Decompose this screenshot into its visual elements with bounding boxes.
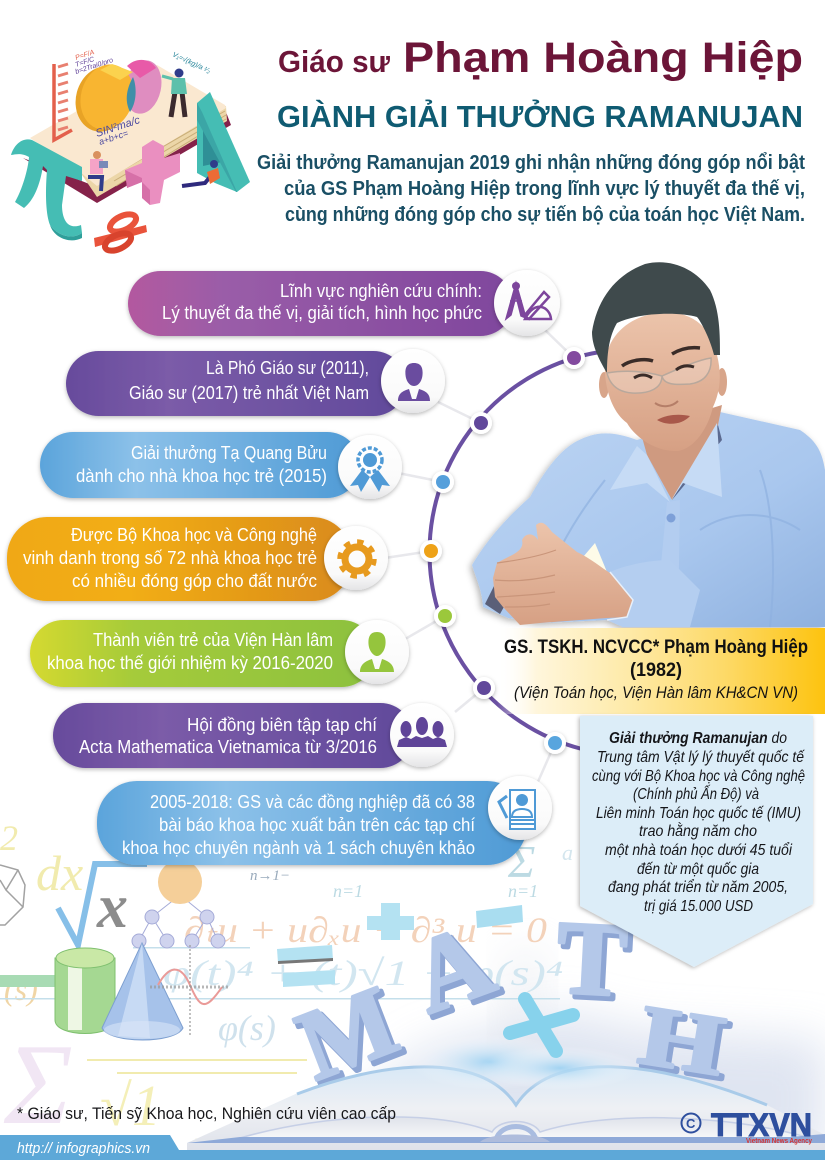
pale math formulas: φ(t)⁴ + (t)√1 + φ(s)⁴ [163,953,563,993]
logo: TTXVN: C [686,1116,696,1131]
eyes, brows, mouth [622,348,700,366]
pill 2: professor: Là Phó Giáo sư (2011), [206,358,369,378]
illustration: math book and figures: a+b+c= [98,128,129,147]
pill 7: publications [97,776,552,865]
3D letters: H [637,991,735,1098]
collar [610,423,722,502]
formula right: V₁=√(kg)/a ¹⁄₂ [171,51,212,75]
cylinder [0,975,68,987]
callout: about the prize: Giải thưởng Ramanujan do [609,730,787,747]
pale math formulas: (s) [4,971,38,1007]
pale math formulas: n→1− [250,868,290,884]
venn pie [120,57,166,117]
3D letters: A [400,904,511,1040]
right sleeve cuff [607,560,700,627]
3D letters: T [554,898,630,1019]
SIN text: SIN²ma/c [94,114,142,140]
footer bar [0,1135,825,1160]
portrait photo [472,262,825,627]
pill 5: academy member: khoa học thế giới nhiệm kỳ 2016-2020 [47,653,333,673]
wireframe polyhedron [0,865,25,925]
caption: name [497,628,825,714]
plus [125,140,180,205]
logo: TTXVN: Vietnam News Agency [746,1138,812,1145]
letter x: x [96,873,128,941]
letter A [197,92,250,192]
icon: person [345,620,409,684]
pale math formulas: a [562,840,573,865]
pale math formulas: Σ [507,836,535,887]
pill 7: publications: khoa học chuyên ngành và 1 sách chuyên khảo [122,838,475,858]
illustration: math book and figures: b=2Trai0/pro [74,57,114,76]
title [277,34,803,134]
title: Giáo sư [278,44,391,79]
shirt [472,412,825,627]
pill 1: research field: Lý thuyết đa thế vị, giải tích, hình học phức [162,303,482,323]
icon: gear [324,526,388,590]
pill 6: editorial board: Hội đồng biên tập tạp chí [187,715,377,735]
pale math formulas: 2 [0,818,18,858]
footnote: * Giáo sư, Tiến sỹ Khoa học, Nghiên cứu viên cao cấp [17,1105,396,1123]
illustration: math book and figures [11,49,250,254]
3D letters: M [287,968,415,1106]
3D letters: H [633,987,731,1094]
hair [592,262,720,373]
hand and forearm [493,523,633,625]
person sitting [93,151,101,159]
timeline arc [385,330,600,800]
open book [187,1067,825,1150]
face [605,312,720,451]
pale math formulas [0,818,573,1154]
neck [640,405,722,500]
plus and minus blocks [367,903,414,940]
letter pi [11,139,82,236]
caption: name: (1982) [630,660,682,681]
title: Phạm Hoàng Hiệp [403,34,803,82]
illustration: math book and figures: T=F/C [74,56,96,69]
timeline dots [420,347,585,754]
person reclining [182,172,214,186]
percent [94,225,147,247]
dark cuff [485,586,505,614]
footer bar: http:// infographics.vn [17,1140,150,1157]
pill 3: Ta Quang Buu prize: dành cho nhà khoa học trẻ (2015) [76,466,327,486]
pill 7: publications: 2005-2018: GS và các đồng nghiệp đã có 38 [150,792,475,812]
book pages side [80,106,227,197]
3D letters: A [396,900,507,1036]
pill 2: professor [66,349,445,416]
equals blocks [277,945,333,963]
3D letters: M [283,964,411,1102]
intro text [257,152,805,226]
callout: about the prize [580,716,813,967]
pale math formulas: √1 [100,1073,161,1138]
pill 4: ministry honour: vinh danh trong số 72 nhà khoa học trẻ [23,548,317,568]
background: math illustration [0,818,825,1160]
callout: about the prize: một nhà toán học dưới 45 tuổi [605,841,792,859]
icon: ribbon [338,435,402,499]
formula small: P=F/A [74,49,96,62]
logo: TTXVN: TTXVN [711,1107,812,1143]
3D letters: T [558,902,634,1023]
callout: about the prize: đang phát triển từ năm 2005, [608,878,788,896]
book top [30,65,226,186]
root sign [58,864,147,945]
callout: about the prize: đến từ một quốc gia [637,861,759,878]
book cover [23,112,231,203]
pill 3: Ta Quang Buu prize [40,432,402,499]
pale math formulas: ∂ₜu + u∂ₓu + ∂³ₓu = 0 [184,910,547,950]
pill 3: Ta Quang Buu prize: Giải thưởng Tạ Quang Bửu [131,443,327,463]
pale math formulas: dx² dy² [190,1137,235,1154]
pill 4: ministry honour [7,517,388,601]
icon: id card [488,776,552,840]
pale math formulas: n=1 [333,881,363,901]
pill 6: editorial board: Acta Mathematica Vietnamica từ 3/2016 [79,737,377,757]
pill 6: editorial board [53,703,454,768]
pale math formulas: Σ [3,1021,73,1149]
icon: group [390,703,454,767]
pill 2: professor: Giáo sư (2017) trẻ nhất Việt Nam [129,383,369,403]
pill 4: ministry honour: có nhiều đóng góp cho đất nước [72,571,317,591]
callout: about the prize: trị giá 15.000 USD [644,898,753,915]
cone [102,943,183,1040]
icon: compass and ruler [494,270,560,336]
left ear and right ear [599,372,609,398]
3D letters [283,898,735,1106]
glasses [607,358,711,393]
times sign [510,999,573,1051]
icon: person [381,349,445,413]
pill 1: research field: Lĩnh vực nghiên cứu chính: [280,281,482,301]
callout: about the prize: (Chính phủ Ấn Độ) và [633,784,759,803]
pale math formulas: dx [36,845,83,901]
person standing [171,92,185,117]
title: GIÀNH GIẢI THƯỞNG RAMANUJAN [277,98,803,134]
ruler [54,64,72,140]
pale math formulas: n=1 [508,881,538,901]
pill 1: research field [128,270,560,336]
pill 5: academy member [30,620,409,687]
pill 4: ministry honour: Được Bộ Khoa học và Công nghệ [71,525,317,545]
pill 5: academy member: Thành viên trẻ của Viện Hàn lâm [93,630,333,650]
gap between arm and torso [583,543,607,572]
pill 7: publications: bài báo khoa học xuất bản trên các tạp chí [159,815,475,835]
network [132,895,225,948]
callout: about the prize: trao hằng năm cho [639,821,757,840]
pale math formulas: φ(s) [218,1008,276,1048]
